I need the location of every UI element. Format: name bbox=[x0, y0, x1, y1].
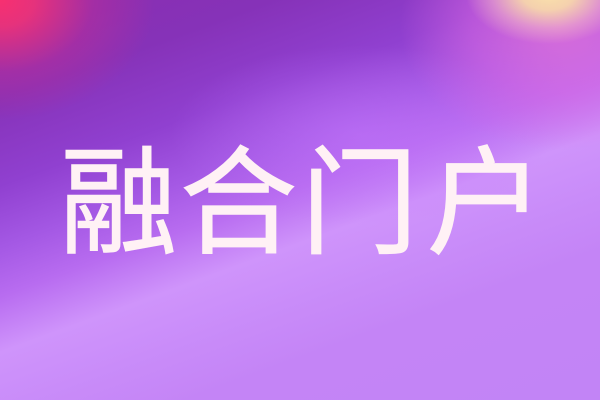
title: 门 bbox=[301, 138, 418, 269]
title: 融 bbox=[60, 138, 177, 269]
title: 户 bbox=[427, 138, 544, 269]
title bbox=[60, 138, 544, 269]
title: 合 bbox=[180, 138, 297, 269]
